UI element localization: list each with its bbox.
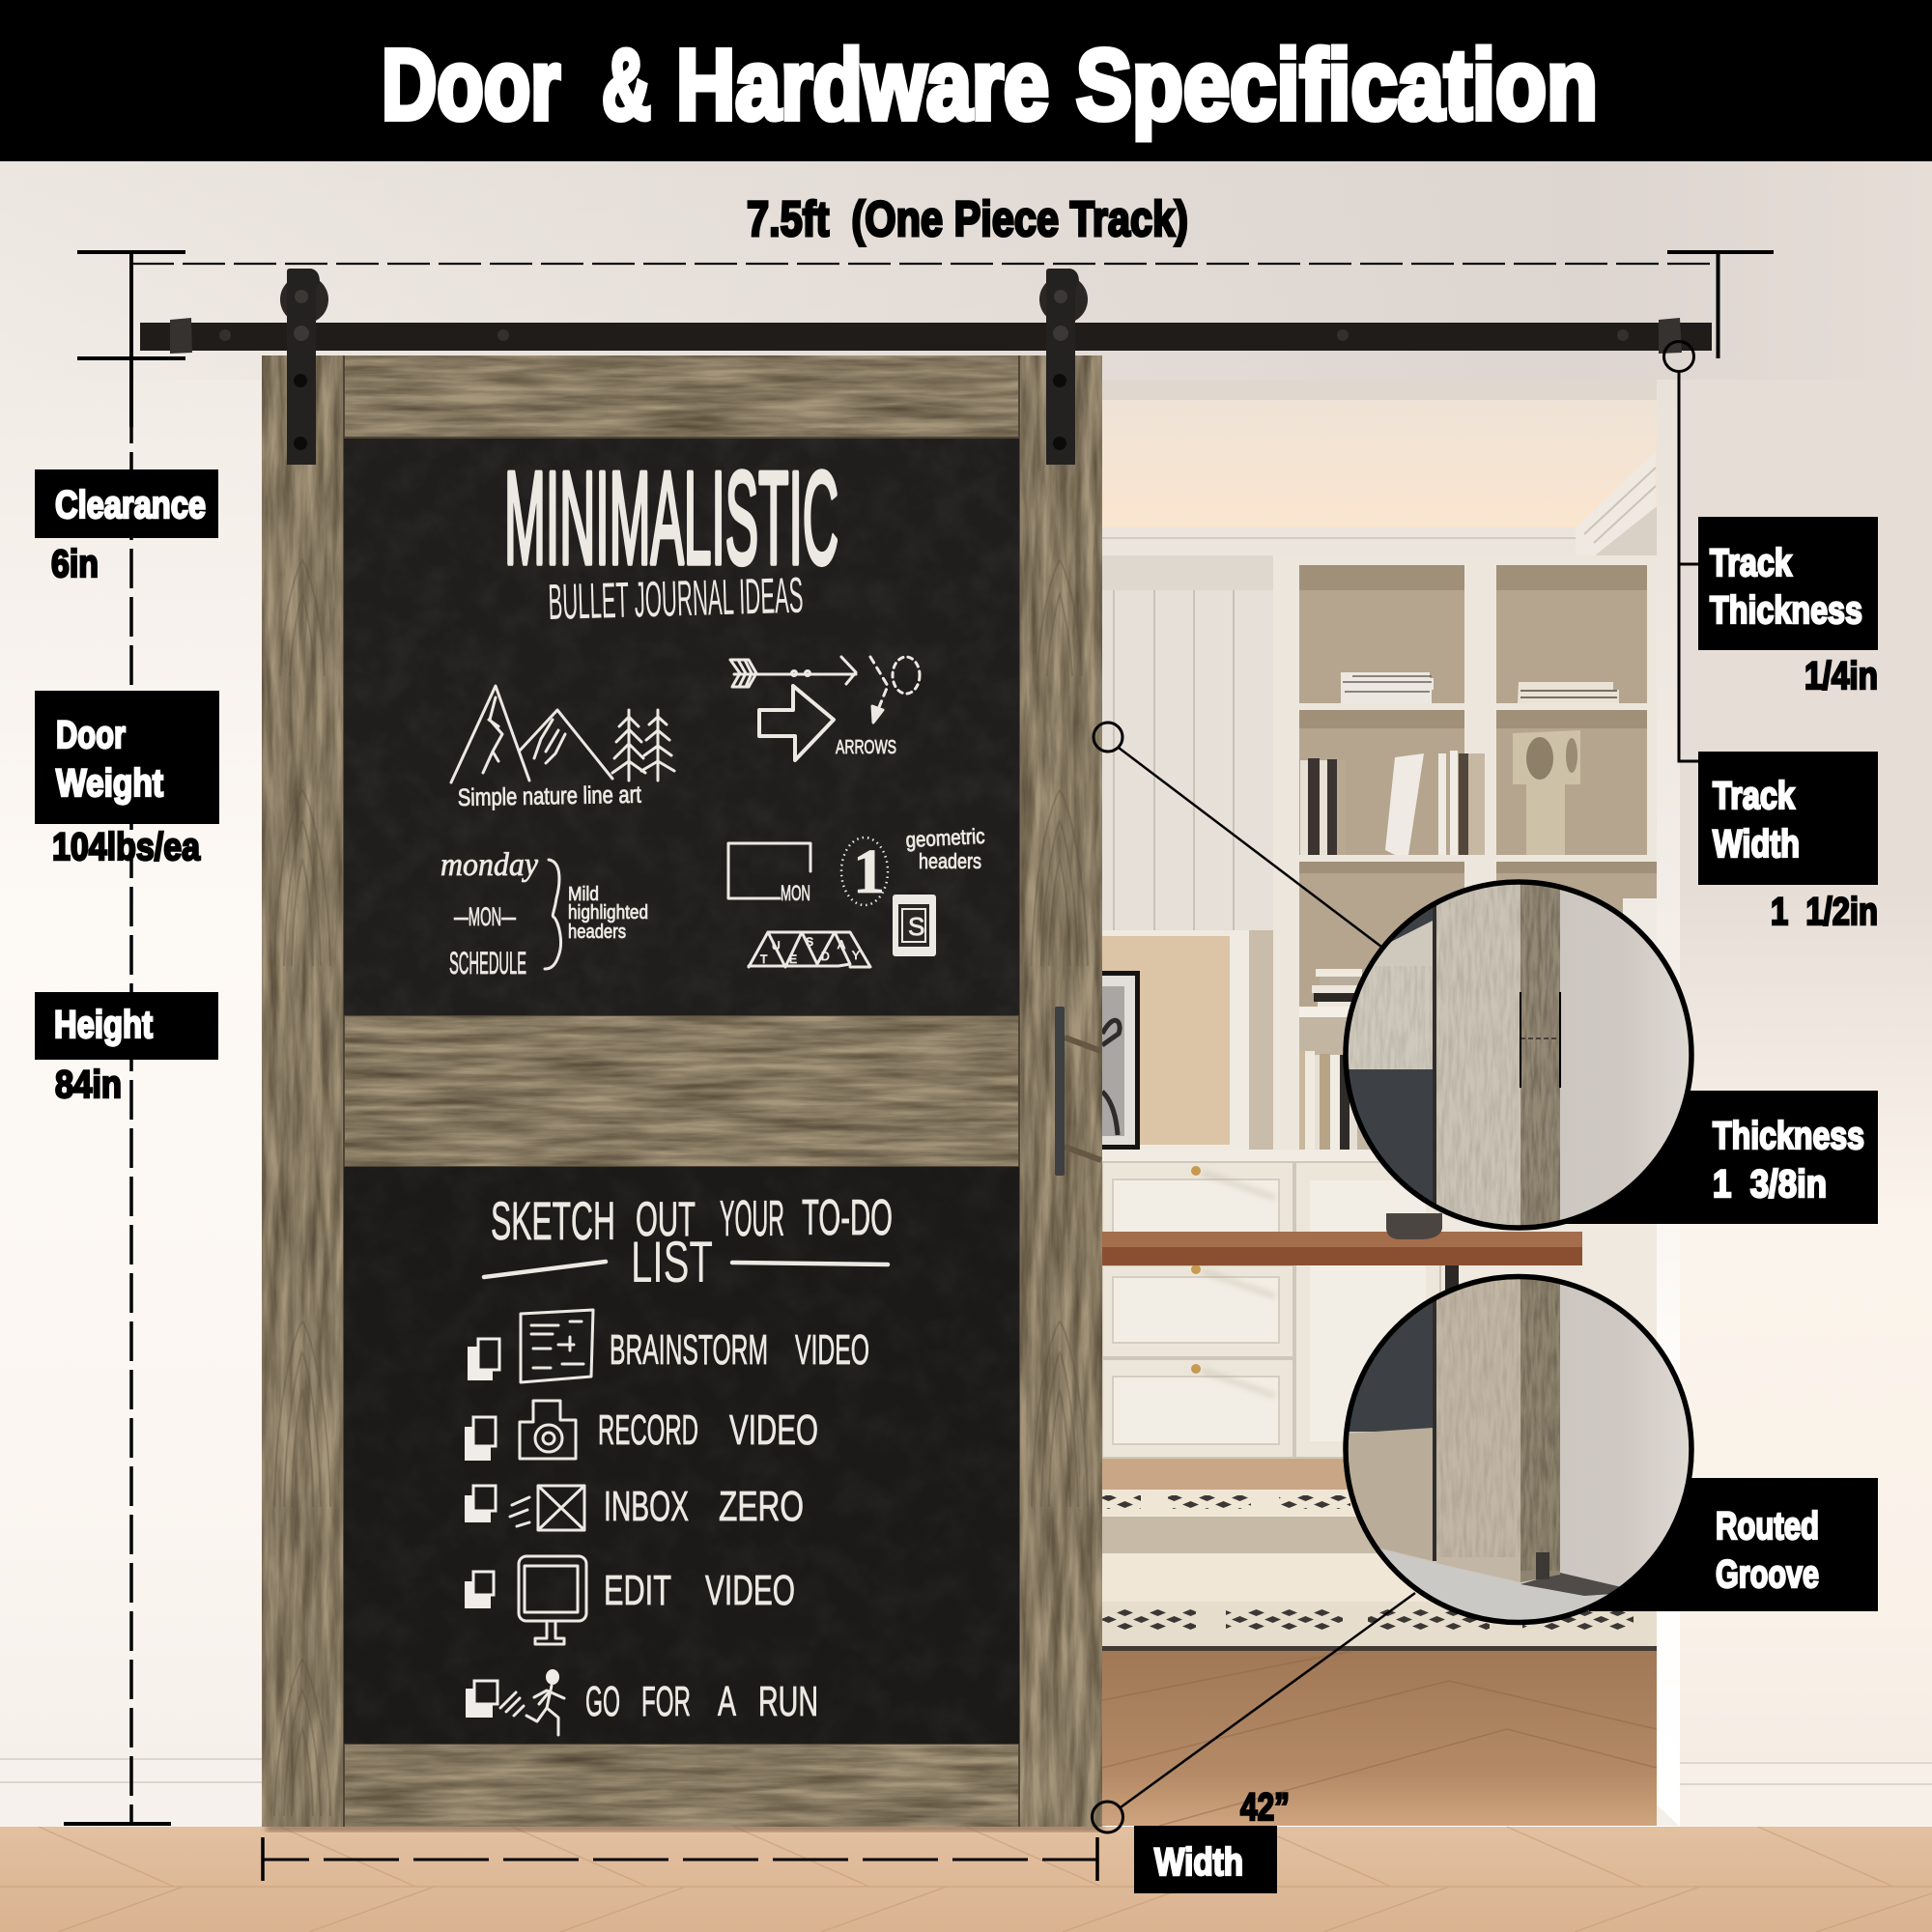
room floor and rug [1102,1459,1657,1826]
chalk caption: arrows: ARROWS [836,737,896,758]
sculpture on shelf [1513,730,1580,855]
callout: height: Height [54,1004,153,1046]
callout: width [1134,1826,1277,1893]
track length label: 7.5ft (One Piece Track) [747,191,1188,246]
chalk heading: to-do list: SKETCH [491,1190,615,1251]
to-do item: edit video: VIDEO [705,1567,795,1614]
chalk geometric headers [728,824,985,967]
chalk heading: to-do list [491,1190,893,1251]
chalk geometric headers: U [772,939,781,952]
to-do item: record video: RECORD [598,1406,698,1454]
to-do item: brainstorm video: BRAINSTORM [610,1326,768,1374]
value: door weight: 104lbs/ea [52,826,201,868]
callout: track thickness: Thickness [1710,589,1862,632]
right hanger strap and wheel [1039,269,1088,465]
to-do item: go for a run: RUN [758,1678,818,1725]
crown moulding [1102,451,1657,555]
chalk geometric headers: E [789,952,797,966]
to-do item: inbox zero [465,1483,804,1530]
bookcase [1273,555,1657,1164]
right end stop [1659,318,1682,354]
callout: thickness: 1 3/8in [1713,1163,1827,1206]
title [382,29,1598,140]
callout: routed groove: Routed [1716,1505,1819,1548]
value: track thickness: 1/4in [1804,655,1878,697]
chalk geometric headers: S [806,935,813,949]
upper chalkboard panel: MINIMALISTIC [504,444,838,591]
value: door width: 42” [1240,1786,1290,1829]
callout: thickness: Thickness [1713,1115,1864,1157]
callout: track thickness [1698,517,1878,650]
chalk header samples [440,847,648,980]
ceiling [1102,400,1657,527]
leader: track callouts [1663,342,1698,761]
chalk geometric headers: A [838,938,845,952]
to-do item: go for a run [466,1669,818,1735]
callout: thickness [1562,1091,1878,1224]
to-do item: inbox zero: INBOX [604,1483,689,1530]
door jamb [1657,380,1680,1827]
chalk header samples: monday [440,847,539,883]
chalk geometric headers: Y [852,949,860,962]
leader: door edge to thickness lens [1094,723,1381,947]
chalk heading: list: LIST [631,1230,713,1294]
barn door [262,355,1102,1827]
chalk geometric headers: MON [781,881,810,905]
callout: track thickness: Track [1710,542,1793,584]
callout: routed groove [1589,1478,1878,1611]
room beyond the door opening [1102,380,1680,1827]
upper chalkboard panel [344,439,1019,1015]
callout: door weight: Weight [56,762,163,805]
chalk header samples: —MON— [454,902,516,931]
chalk geometric headers: geometric [905,824,985,852]
door handle [1055,1007,1101,1176]
chalk geometric headers: S [908,912,924,941]
shadow under door [266,1825,1102,1832]
left end stop [170,318,192,354]
title: Door [382,29,560,140]
art prints [1102,930,1273,1150]
chalk geometric headers: headers [919,849,981,873]
soffit [1102,380,1657,400]
left stile [262,355,344,1827]
callout: clearance: Clearance [55,484,206,526]
top rail [344,355,1019,438]
callout: door weight: Door [56,714,126,756]
to-do item: brainstorm video: VIDEO [795,1326,869,1374]
chalk header samples: highlighted [568,902,648,923]
to-do item: inbox zero: ZERO [719,1483,804,1530]
title: & [602,29,651,140]
bottom rail [344,1744,1019,1827]
door width dimension line [263,1837,1097,1881]
to-do item: edit video [465,1556,795,1644]
callout: track width: Width [1713,823,1800,866]
chalk caption: nature: Simple nature line art [458,781,641,811]
chalk drawing: mountains and trees [451,686,674,782]
leader: door corner to groove lens [1092,1593,1415,1833]
cabinets [1102,1150,1657,1459]
middle rail [344,1015,1019,1167]
chalk drawing: arrows [730,657,920,760]
callout: clearance [35,469,218,538]
callout: door weight [35,691,219,824]
callout: track width: Track [1713,775,1796,817]
chalk heading: list [484,1230,888,1294]
to-do item: go for a run: FOR [641,1678,691,1725]
title bar [0,0,1932,161]
books on shelves [1300,672,1619,855]
callout: height [35,992,218,1060]
value: track width: 1 1/2in [1771,891,1878,933]
chalk header samples: SCHEDULE [449,946,526,980]
right stile [1019,355,1102,1827]
value: height: 84in [55,1064,122,1106]
to-do item: record video: VIDEO [729,1406,818,1454]
callout: width: Width [1154,1841,1243,1884]
to-do item: edit video: EDIT [604,1567,671,1614]
chalk heading: to-do list: TO-DO [802,1190,893,1246]
chalk header samples: headers [568,922,626,943]
lower shelf books [1299,898,1657,1150]
chalk heading: to-do list: YOUR [720,1191,784,1247]
callout: routed groove: Groove [1716,1553,1819,1596]
to-do item: go for a run: A [718,1678,736,1725]
left hanger strap and wheel [280,269,328,465]
thickness marker [1520,992,1560,1088]
to-do item: record video [465,1401,818,1461]
baseboards [0,1758,1932,1827]
chalk heading: to-do list: OUT [636,1192,696,1246]
sliding track [140,318,1712,354]
door height dimension line [64,427,171,1824]
lower chalkboard panel [344,1167,1019,1744]
to-do item: brainstorm video [468,1310,869,1382]
upper chalkboard panel: BULLET JOURNAL IDEAS [548,568,804,631]
magnifier lens: door thickness [1346,882,1691,1228]
title: Specification [1076,29,1598,140]
chalk geometric headers: T [760,952,768,966]
chalk geometric headers: 1 [853,837,885,907]
value: clearance: 6in [51,543,99,585]
title: Hardware [676,29,1049,140]
desk [1102,1213,1582,1290]
floor [0,1827,1932,1932]
chalk geometric headers: D [821,950,830,963]
callout: track width [1698,752,1878,885]
panelled back wall [1102,555,1315,1174]
track width dimension line [77,252,1774,427]
to-do item: go for a run: GO [585,1678,620,1725]
chalk header samples: Mild [568,884,599,905]
magnifier lens: routed groove [1346,1277,1691,1623]
